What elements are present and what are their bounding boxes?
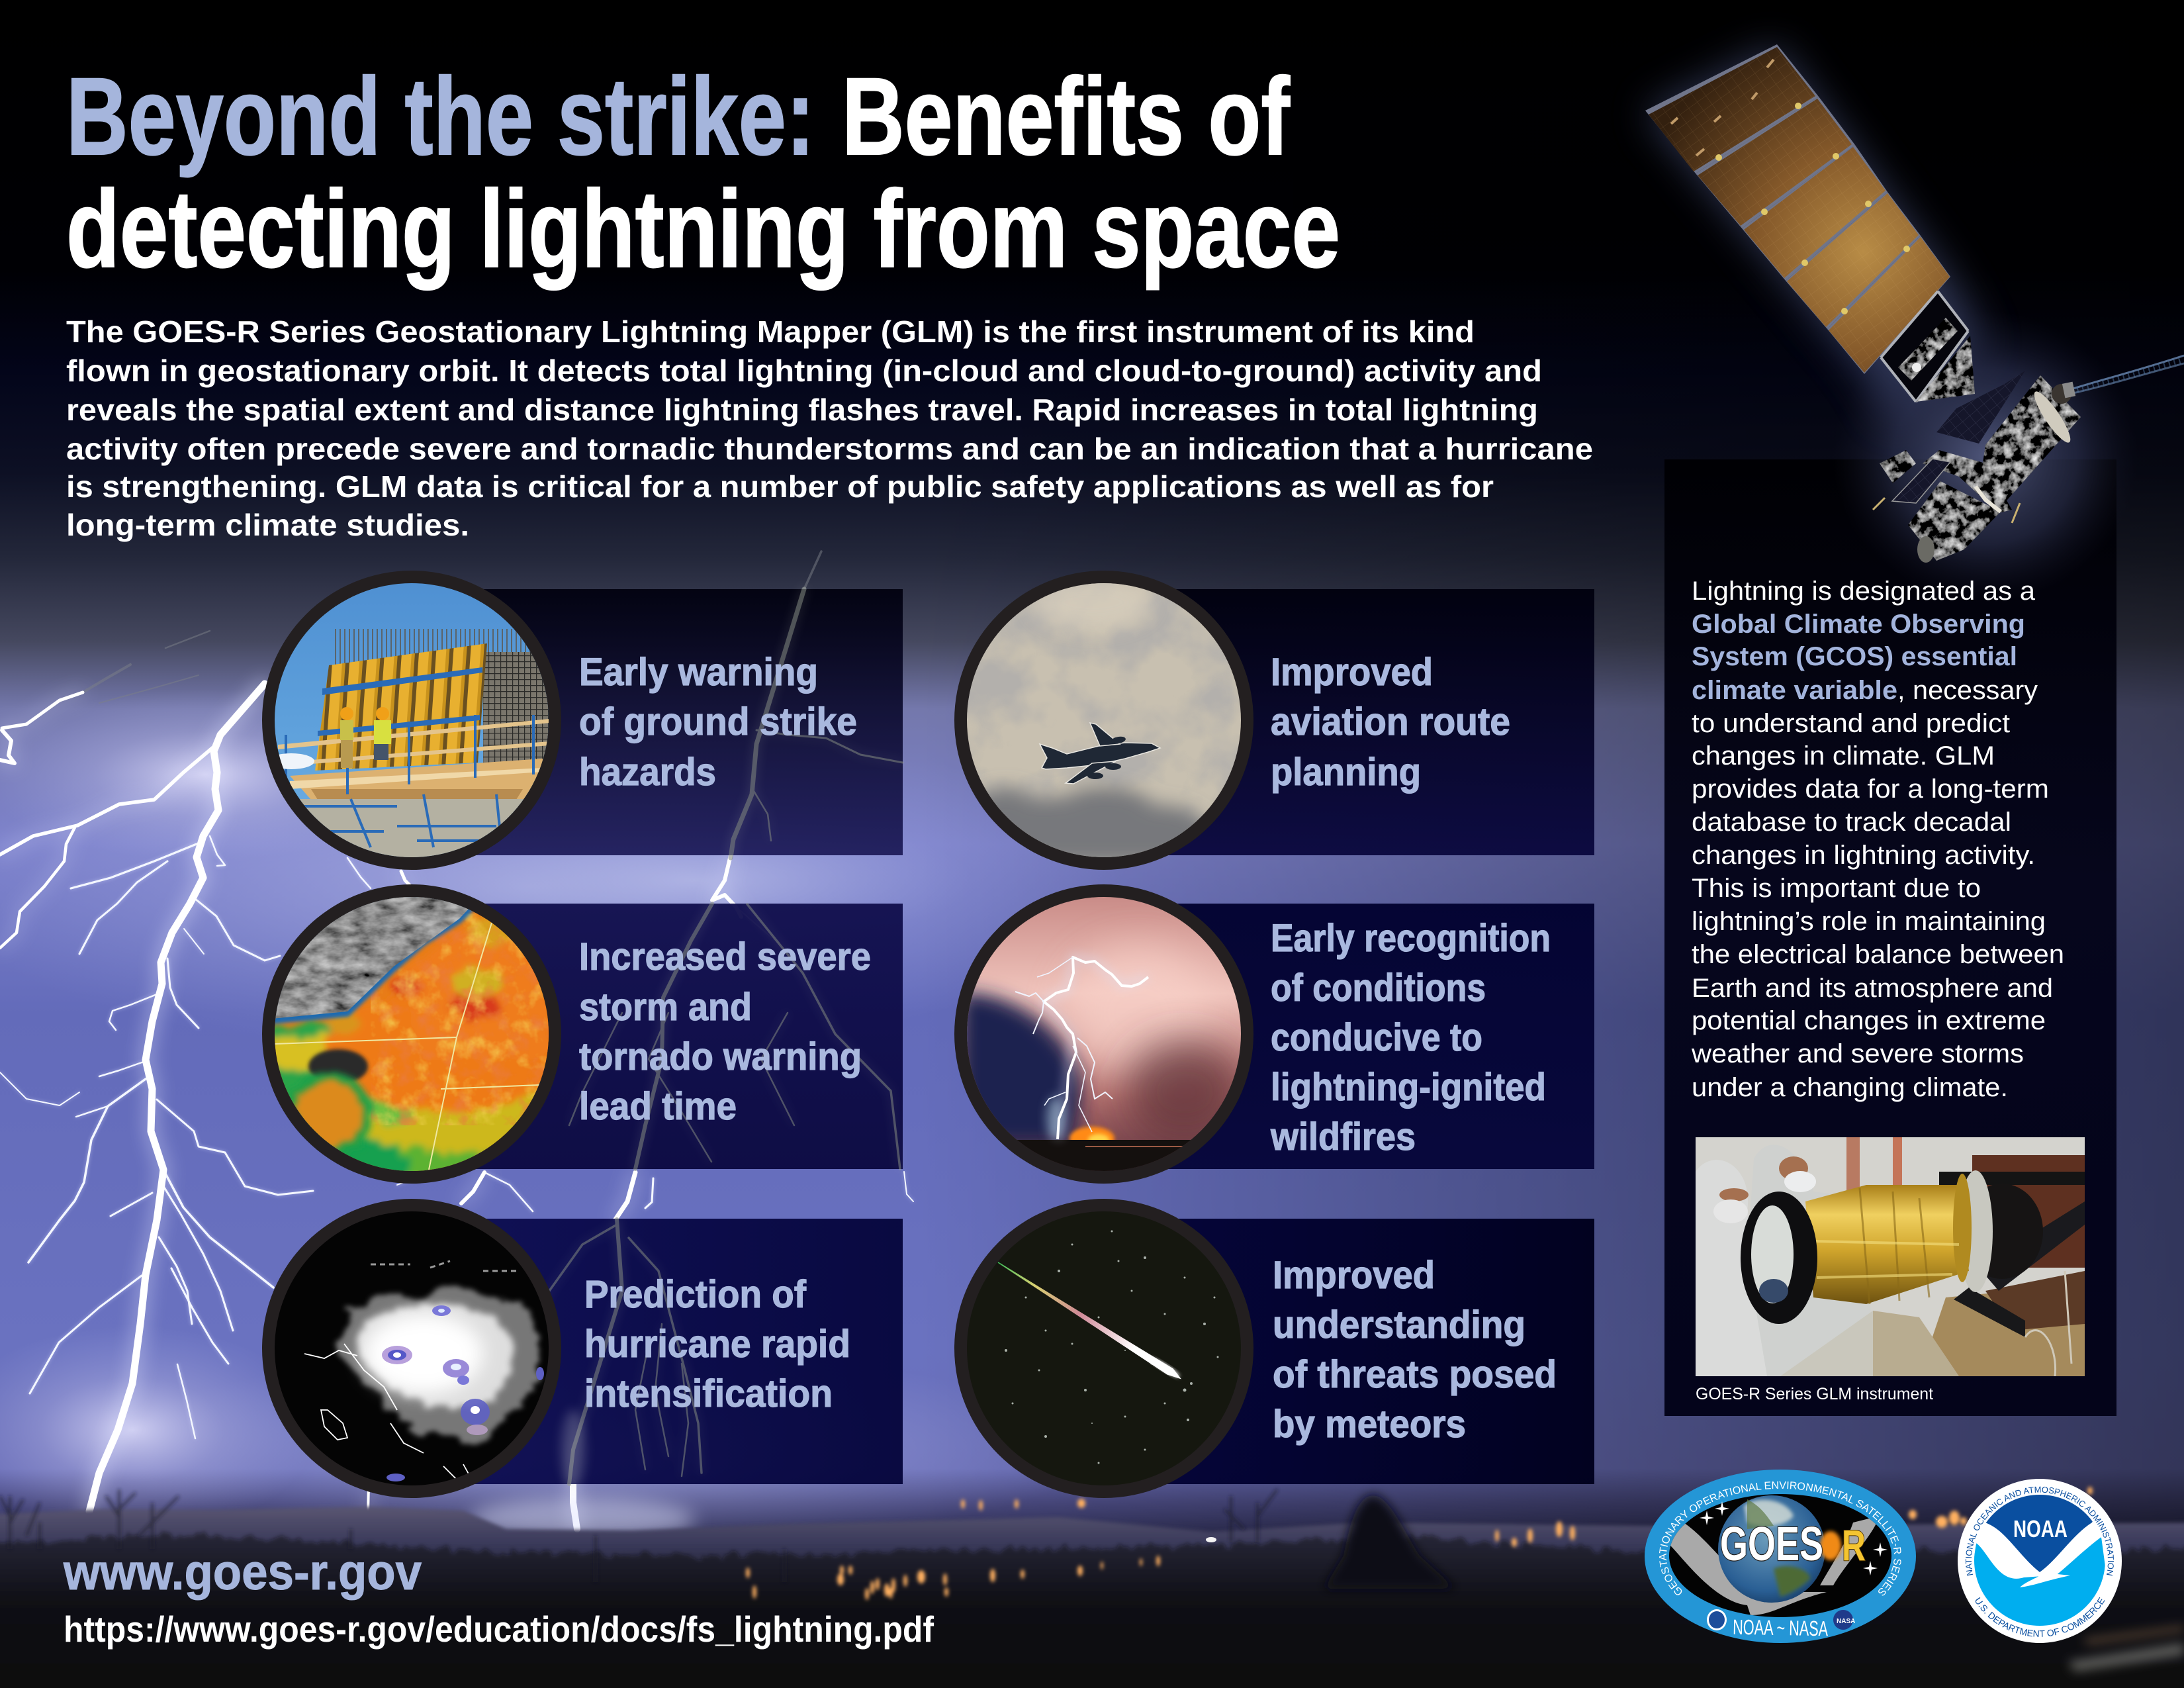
title: Beyond the strike: — [66, 56, 815, 178]
sidebar text: potential changes in extreme — [1692, 1006, 2046, 1035]
text: improved aviation: aviation route — [1271, 700, 1510, 743]
satellite: GOES-R spacecraft — [1645, 44, 2184, 563]
text: wildfire recognition: conducive to — [1271, 1016, 1482, 1059]
logo: NOAA: U.S. DEPARTMENT OF COMMERCE — [1975, 1597, 2105, 1637]
logo: NOAA — [1958, 1479, 2122, 1643]
text: hurricane prediction: hurricane rapid — [584, 1323, 850, 1366]
text: meteors: of threats posed — [1273, 1353, 1557, 1396]
text: severe storm warning: tornado warning — [579, 1035, 862, 1078]
caption: GLM instrument: GOES-R Series GLM instrument — [1696, 1385, 1933, 1403]
text: early warning: Early warning — [579, 651, 818, 694]
logo: GOES-R mission: GOES — [1720, 1518, 1823, 1571]
intro paragraph: activity often precede severe and tornadic thunderstorms and can be an indication that a hurricane — [66, 432, 1593, 466]
text: hurricane prediction — [584, 1273, 850, 1415]
text: wildfire recognition: Early recognition — [1271, 917, 1551, 960]
sidebar text: Global Climate Observing — [1692, 610, 2025, 639]
intro paragraph: The GOES-R Series Geostationary Lightning Mapper (GLM) is the first instrument of its kind — [66, 314, 1475, 349]
text: improved aviation: Improved — [1271, 651, 1433, 694]
sidebar text: Earth and its atmosphere and — [1692, 974, 2053, 1003]
text: early warning: of ground strike — [579, 700, 857, 743]
sidebar text: lightning’s role in maintaining — [1692, 907, 2046, 936]
sidebar text: to understand and predict — [1692, 709, 2010, 738]
text: early warning: hazards — [579, 751, 716, 794]
sidebar text: provides data for a long-term — [1692, 774, 2049, 804]
lightning bolts in the sky — [0, 551, 913, 1529]
text: meteors: understanding — [1273, 1303, 1525, 1346]
logo: GOES-R mission: GEOSTATIONARY OPERATIONAL ENVIRONMENTAL SATELLITE-R SERIES — [1659, 1481, 1901, 1595]
text: wildfire recognition — [1270, 917, 1551, 1158]
logo: GOES-R mission: NASA — [1837, 1618, 1855, 1625]
image: satellite radar of severe storm — [262, 884, 576, 1192]
text: improved aviation — [1271, 651, 1510, 794]
sidebar text: weather and severe storms — [1691, 1039, 2024, 1068]
sidebar panel — [1664, 459, 2116, 1416]
title: detecting lightning from space — [66, 168, 1340, 291]
text: improved aviation: planning — [1271, 751, 1421, 794]
sidebar text: climate variable — [1692, 676, 1897, 705]
panel: improved understanding of threats posed by meteors — [1104, 1219, 1594, 1484]
text: wildfire recognition: of conditions — [1271, 966, 1486, 1009]
photo: airplane in cloudy sky — [954, 571, 1253, 870]
text: hurricane prediction: intensification — [584, 1372, 833, 1415]
text: wildfire recognition: lightning-ignited — [1271, 1066, 1546, 1109]
panel: early recognition of wildfire conditions — [1104, 904, 1594, 1169]
sidebar text: System (GCOS) essential — [1692, 642, 2017, 671]
satellite glow — [1645, 46, 2138, 602]
text: severe storm warning — [579, 935, 871, 1128]
photo: lightning and wildfire — [954, 884, 1253, 1184]
logo: GOES-R mission: NOAA ~ NASA — [1733, 1615, 1829, 1640]
intro paragraph: long-term climate studies. — [66, 508, 469, 542]
sidebar text: , necessary — [1897, 676, 2038, 705]
fact sheet url: https://www.goes-r.gov/education/docs/fs_lightning.pdf — [64, 1609, 934, 1650]
sidebar text: the electrical balance between — [1692, 940, 2064, 969]
logo: GOES-R mission — [1645, 1470, 1916, 1643]
sidebar text — [1691, 577, 2064, 1102]
text: severe storm warning: storm and — [579, 986, 752, 1029]
intro paragraph: flown in geostationary orbit. It detects total lightning (in-cloud and cloud-to-ground) activity and — [66, 353, 1542, 388]
title — [66, 56, 1340, 291]
panel: improved aviation route planning — [1104, 589, 1594, 855]
sidebar text: Lightning is designated as a — [1692, 577, 2036, 606]
sidebar text: This is important due to — [1692, 874, 1981, 903]
photo: GLM instrument in cleanroom — [1696, 1137, 2085, 1376]
text: meteors: by meteors — [1273, 1403, 1466, 1446]
photo: meteor streak in starry sky — [954, 1199, 1253, 1498]
sidebar text: under a changing climate. — [1692, 1073, 2008, 1102]
photo: construction site — [262, 571, 561, 870]
panel: increased severe storm and tornado warning lead time — [412, 904, 903, 1169]
panel: prediction of hurricane rapid intensification — [412, 1219, 903, 1484]
sidebar text: changes in climate. GLM — [1692, 741, 1995, 771]
logo: GOES-R mission: R — [1842, 1521, 1866, 1570]
website link: www.goes-r.gov — [63, 1544, 422, 1601]
text: meteors — [1273, 1254, 1557, 1446]
sidebar text: database to track decadal — [1692, 808, 2011, 837]
text: meteors: Improved — [1273, 1254, 1435, 1297]
text: hurricane prediction: Prediction of — [584, 1273, 807, 1316]
text: early warning — [579, 651, 857, 794]
panel: early warning of ground strike hazards — [412, 589, 903, 855]
intro paragraph: is strengthening. GLM data is critical for a number of public safety applications as well as for — [66, 469, 1494, 504]
text: severe storm warning: lead time — [579, 1085, 737, 1128]
intro paragraph: reveals the spatial extent and distance lightning flashes travel. Rapid increases in total lightning — [66, 393, 1538, 427]
sidebar text: changes in lightning activity. — [1692, 841, 2035, 870]
title: Benefits of — [842, 56, 1291, 178]
logo: NOAA: NATIONAL OCEANIC AND ATMOSPHERIC ADMINISTRATION — [1966, 1487, 2114, 1575]
logo: NOAA: NOAA — [2013, 1515, 2068, 1542]
text: severe storm warning: Increased severe — [579, 935, 871, 978]
lightning seen through the panels — [523, 589, 903, 1489]
image: hurricane from satellite — [262, 1199, 561, 1498]
text: wildfire recognition: wildfires — [1270, 1115, 1416, 1158]
landscape: hills, trees and town lights — [0, 1487, 2184, 1688]
intro paragraph — [66, 314, 1593, 542]
